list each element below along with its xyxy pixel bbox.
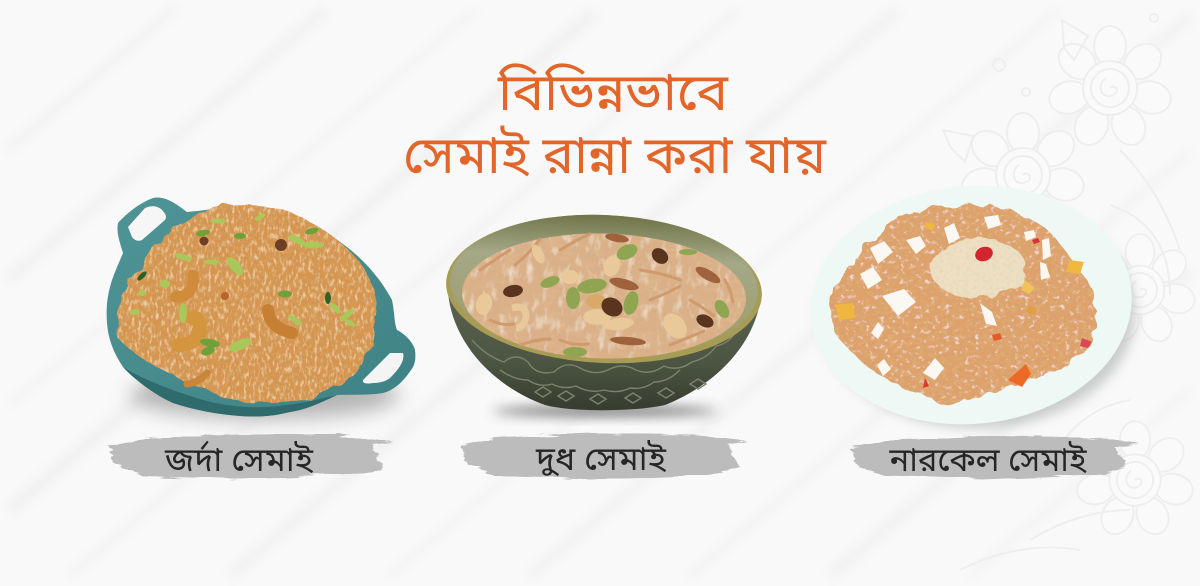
bowl inner wall xyxy=(447,208,761,364)
dish 2: dudh semai in green bowl xyxy=(443,208,765,416)
nuts xyxy=(473,232,732,357)
brush stroke xyxy=(109,434,393,479)
coconut flakes xyxy=(860,215,1051,380)
title xyxy=(403,63,827,195)
brush stroke xyxy=(851,436,1137,479)
bowl shadow xyxy=(493,406,717,416)
coconut heap xyxy=(930,238,1026,298)
dark pistachio pieces xyxy=(136,226,331,357)
bowl rim xyxy=(443,208,765,370)
label: dudh semai xyxy=(461,434,749,484)
vermicelli and toppings xyxy=(830,204,1096,405)
vermicelli mound xyxy=(117,205,377,403)
title line 1: বিভিন্নভাবে xyxy=(497,63,729,132)
cashews xyxy=(175,275,292,384)
plate lower rim shading xyxy=(123,367,337,417)
bowl body xyxy=(448,292,761,410)
plate shadow xyxy=(819,198,1135,428)
dish 3: narkel semai on white plate xyxy=(800,172,1142,438)
brush stroke xyxy=(461,434,749,479)
title line 2: সেমাই রান্না করা যায় xyxy=(403,126,827,195)
dish 1: jorda semai on teal plate xyxy=(107,197,415,419)
label: narkel semai xyxy=(851,436,1137,485)
teal plate with handles xyxy=(107,197,415,417)
plate handle openings xyxy=(128,206,166,241)
label text: দুধ সেমাই xyxy=(535,439,666,484)
label text: নারকেল সেমাই xyxy=(889,440,1087,485)
coloured fruit pieces xyxy=(835,222,1092,388)
white plate xyxy=(800,172,1142,438)
label: jorda semai xyxy=(109,434,393,485)
raisins xyxy=(200,236,287,300)
creamy semai xyxy=(460,230,748,362)
pistachio slivers xyxy=(130,212,356,354)
noodle strands xyxy=(480,234,733,345)
label text: জর্দা সেমাই xyxy=(164,440,313,485)
cherry xyxy=(973,244,995,264)
plate shadow xyxy=(130,371,400,419)
bowl engraved pattern xyxy=(472,332,736,404)
decorative mandala watermark xyxy=(943,14,1198,570)
